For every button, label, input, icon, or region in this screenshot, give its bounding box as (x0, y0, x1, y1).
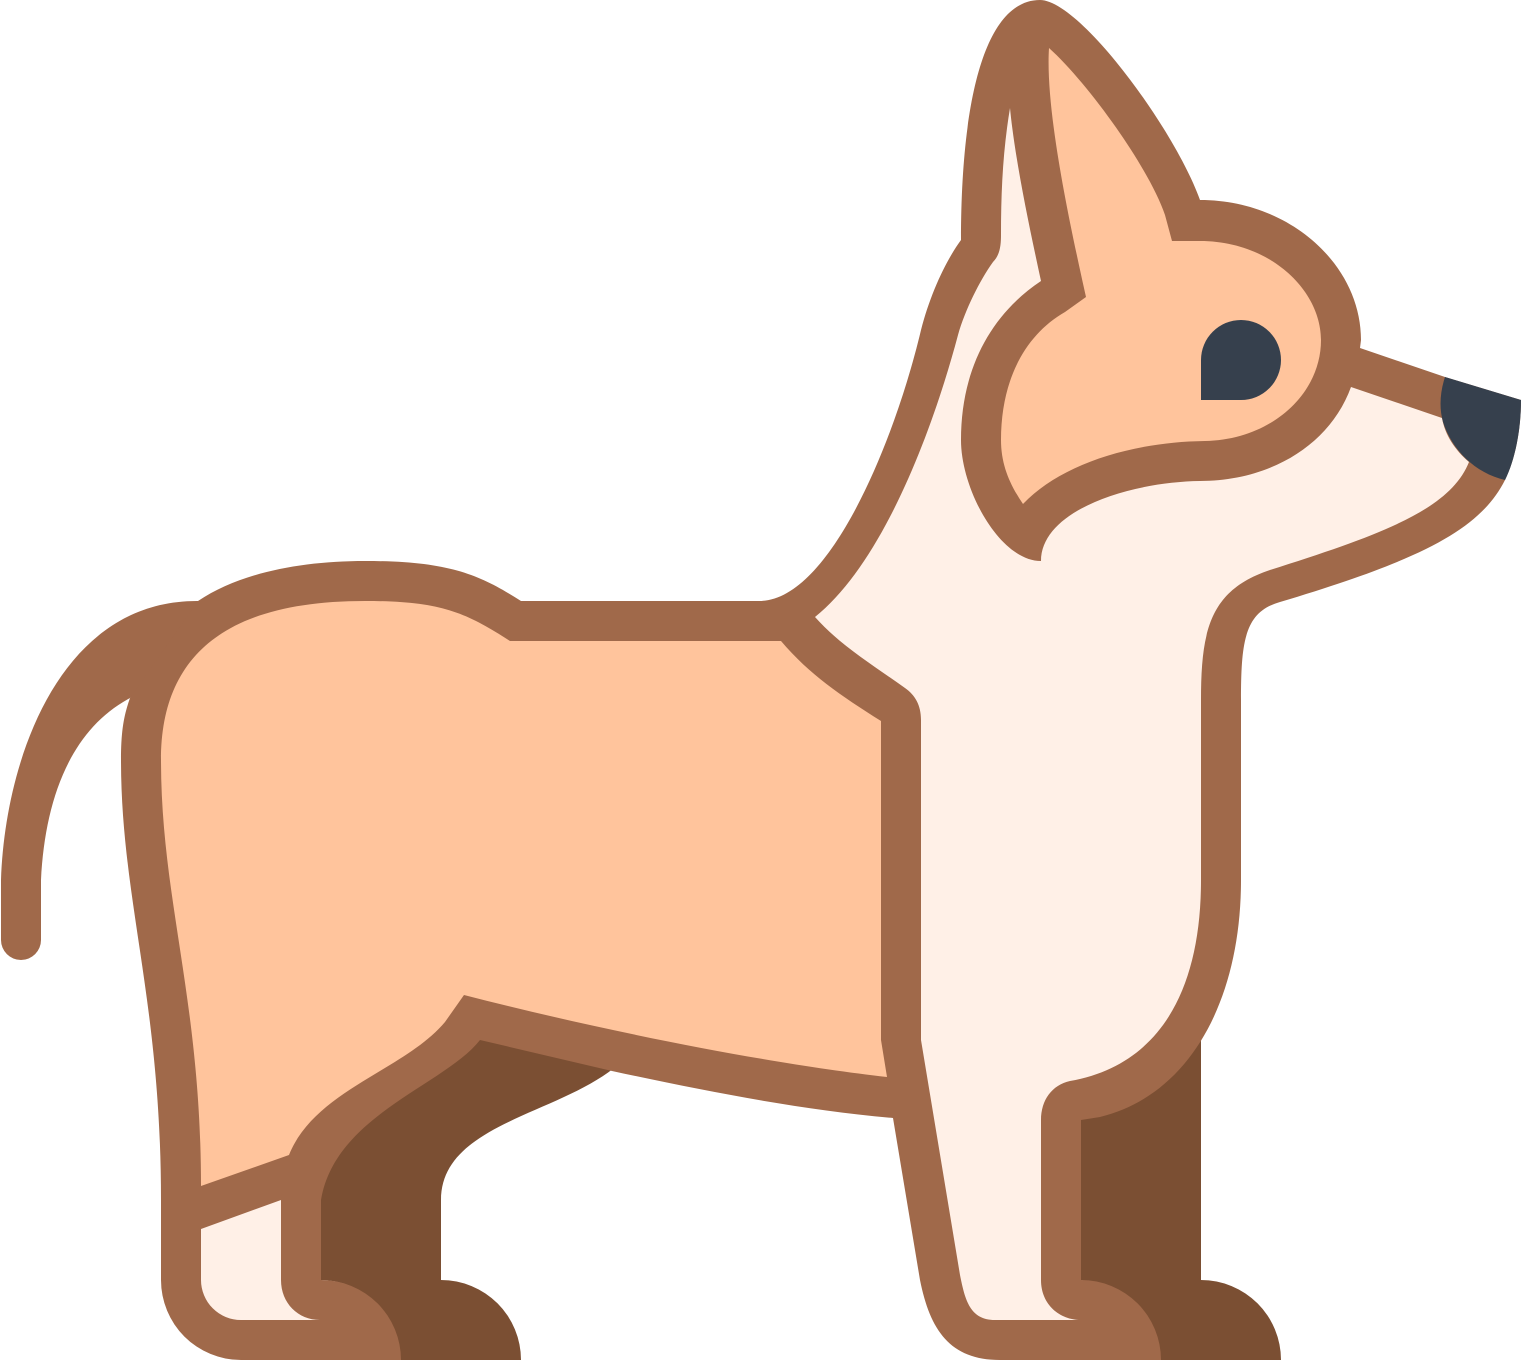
orange head and ear (1001, 48, 1321, 504)
icon: eye (1201, 320, 1281, 400)
cream chest, neck and front leg (815, 108, 1469, 1320)
icon: nose (1441, 377, 1521, 480)
tail (1, 601, 225, 960)
far back leg (320, 1030, 614, 1360)
far front leg (1075, 1035, 1281, 1360)
orange body patch (161, 601, 887, 1186)
cream rear foot (201, 1200, 320, 1320)
